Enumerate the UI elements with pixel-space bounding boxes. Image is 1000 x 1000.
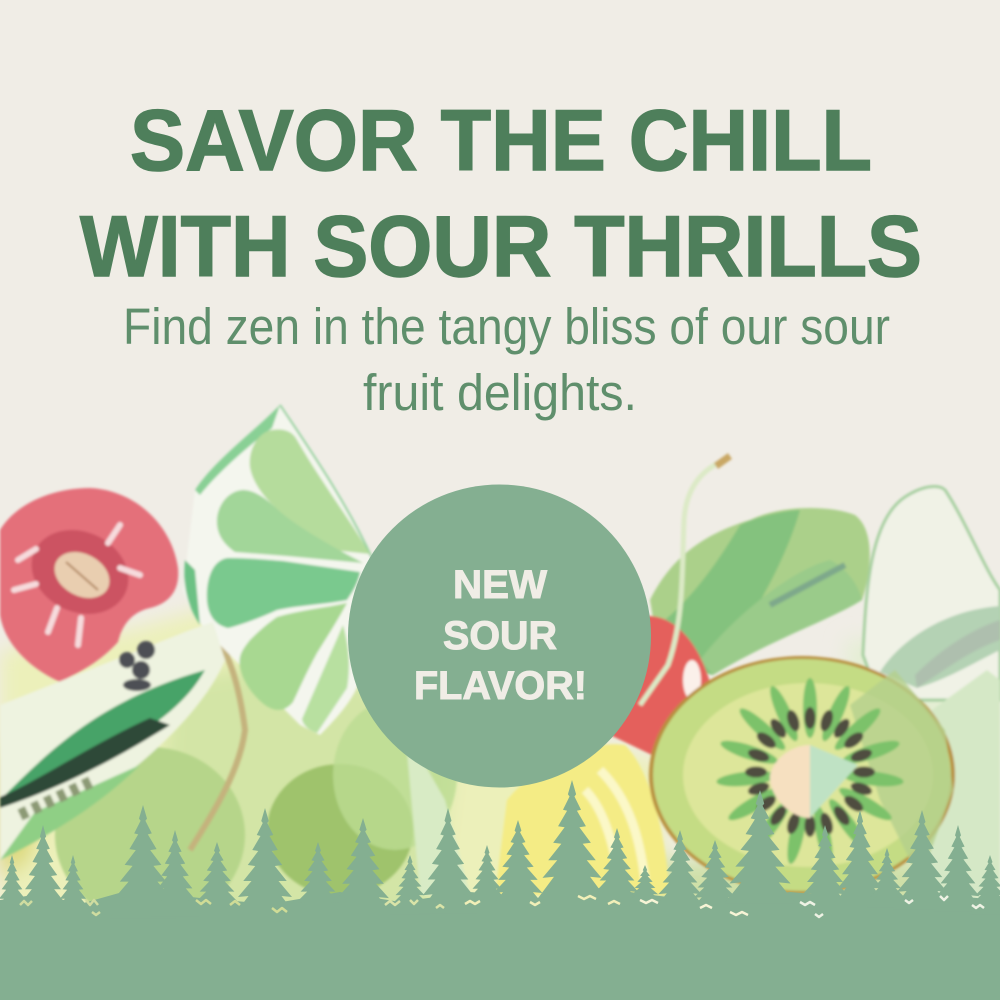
title xyxy=(80,93,922,295)
badge text: FLAVOR! xyxy=(414,664,587,708)
subtitle xyxy=(123,298,890,421)
title: SAVOR THE CHILL xyxy=(130,93,872,189)
forest treeline xyxy=(0,780,1000,1000)
treeline flecks xyxy=(20,896,984,917)
subtitle: Find zen in the tangy bliss of our sour xyxy=(123,298,890,355)
pale pear outline xyxy=(863,487,1000,700)
kiwi core xyxy=(770,745,810,818)
fruit illustration xyxy=(0,405,1000,925)
badge circle xyxy=(348,484,651,788)
large leaf xyxy=(650,508,870,675)
lime wedge xyxy=(183,405,372,735)
halved cherry xyxy=(0,488,178,682)
red cherry xyxy=(610,616,712,755)
lemon xyxy=(495,744,670,895)
striped leaf xyxy=(0,622,225,860)
kiwi seed rays xyxy=(716,678,904,865)
cherry stem xyxy=(640,460,725,705)
pale pear body xyxy=(920,670,1000,900)
subtitle: fruit delights. xyxy=(363,364,637,421)
badge text: SOUR xyxy=(443,614,557,658)
twig xyxy=(190,622,245,850)
badge xyxy=(348,484,651,788)
ground xyxy=(0,888,1000,1000)
grey-green leaf xyxy=(880,606,1000,688)
title: WITH SOUR THRILLS xyxy=(80,199,922,295)
kiwi seeds xyxy=(745,707,875,837)
cherry pit xyxy=(47,543,117,607)
kiwi slice xyxy=(649,656,955,894)
conifers xyxy=(0,855,31,920)
pale green circle leaves xyxy=(55,747,245,923)
kiwi highlight xyxy=(850,670,953,880)
soft colour wash xyxy=(0,570,1000,925)
badge text: NEW xyxy=(453,563,547,607)
badge text xyxy=(414,563,587,708)
